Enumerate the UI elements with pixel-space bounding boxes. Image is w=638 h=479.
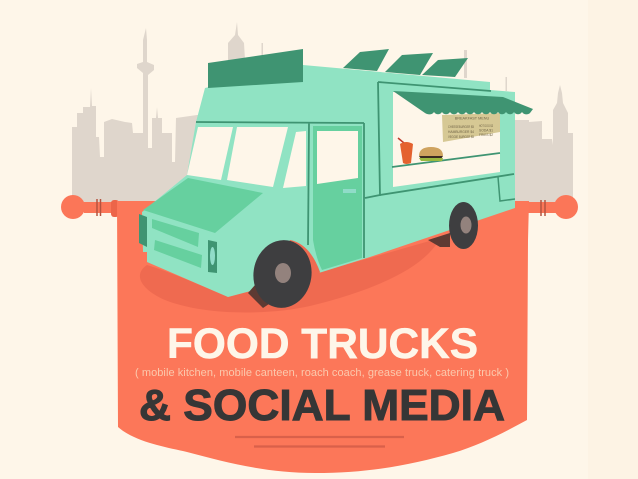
front wheel: [248, 236, 320, 312]
hood: [143, 178, 263, 233]
menu board: FRIES $2: [479, 133, 493, 137]
serving window: [393, 92, 500, 187]
banner: [61, 195, 578, 473]
food truck: [139, 49, 533, 312]
city skyline: [72, 22, 573, 205]
menu board: CHEESEBURGER $5: [448, 125, 474, 129]
roof signs: [343, 49, 468, 77]
awning: [393, 91, 533, 114]
rear panel lines: [498, 177, 515, 201]
bumper: [139, 214, 147, 247]
menu board: HAMBURGER $4: [448, 130, 474, 134]
title: social media: & SOCIAL MEDIA: [139, 381, 505, 430]
burger: [419, 147, 443, 161]
menu board: [442, 113, 500, 142]
door: [313, 126, 362, 270]
banner cloth: [117, 201, 529, 473]
divider lines: [235, 437, 404, 446]
cab outline: [196, 82, 514, 258]
headlight: [208, 240, 217, 273]
drink: [398, 138, 413, 164]
rear wheel: [428, 202, 478, 249]
title: food trucks: FOOD TRUCKS: [167, 320, 478, 368]
right rod: [522, 195, 578, 219]
subtitle: ( mobile kitchen, mobile canteen, roach coach, grease truck, catering truck ): [135, 367, 509, 379]
menu board: HOT DOG $3: [479, 124, 493, 128]
door handle: [343, 189, 356, 193]
menu board: VEGGIE BURGER $5: [448, 135, 474, 139]
truck body: [142, 65, 515, 297]
left rod: [61, 195, 120, 219]
windshield and side window: [187, 127, 233, 180]
front sign: [208, 49, 303, 88]
menu board: SODA $1: [479, 128, 493, 132]
truck shadow on banner: [140, 238, 440, 312]
door window: [317, 131, 358, 184]
menu board: BREAKFAST MENU: [455, 116, 490, 120]
grille: [152, 219, 202, 268]
shelf: [392, 153, 500, 167]
